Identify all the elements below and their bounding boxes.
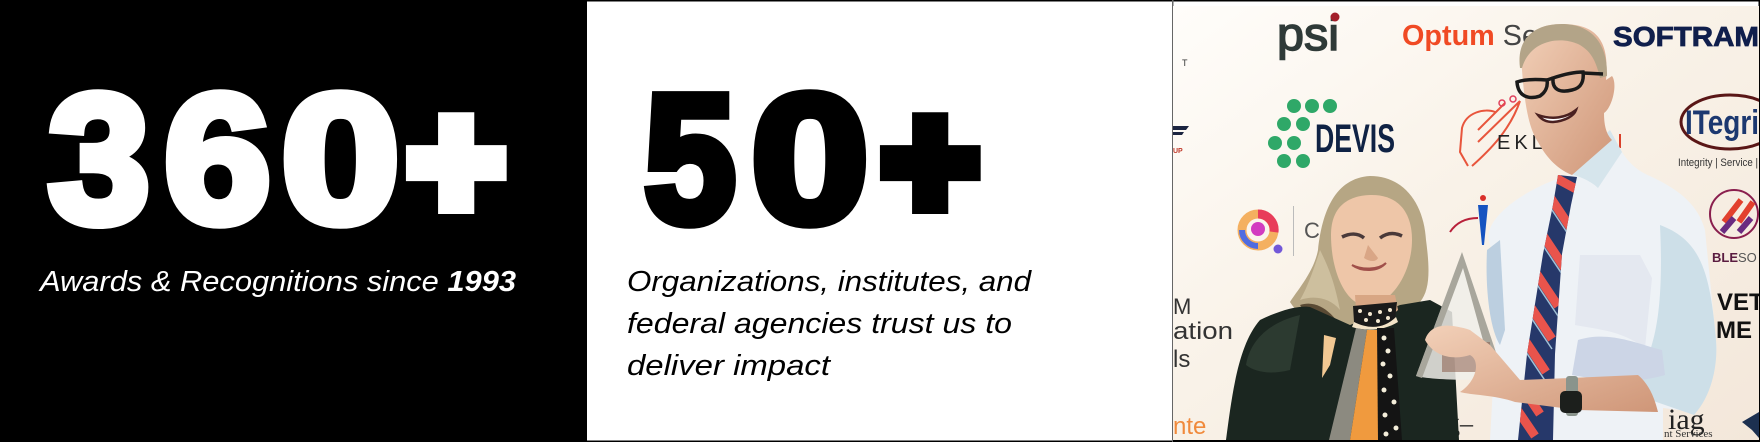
logo: text fragments: ls <box>1173 346 1190 373</box>
caption: organizations trust us <box>627 266 1032 382</box>
big number: 360+: 0 <box>281 56 400 261</box>
logo: partial left edge: UP <box>1173 148 1183 155</box>
logo: text fragments: ME <box>1716 317 1752 344</box>
person: woman <box>1226 176 1459 440</box>
watch <box>1560 376 1582 416</box>
big number: 360+: 3 <box>48 56 150 261</box>
big number: 50+: 5 <box>644 56 736 261</box>
logo: partial left edge <box>1173 58 1189 155</box>
logo: partial left edge: T <box>1182 58 1188 68</box>
logo: Bluesource ring <box>1710 190 1758 265</box>
logo: Bluesource ring: BLESO <box>1712 250 1757 265</box>
logo: psi: psi <box>1277 8 1339 60</box>
big number: 360+ <box>48 56 504 261</box>
logo: Q: C <box>1304 218 1320 243</box>
smile <box>1538 110 1576 122</box>
hair <box>1290 176 1428 333</box>
logo: text fragments: nt Services <box>1664 428 1713 440</box>
person: man <box>1487 24 1716 440</box>
logo: Optum: Optum Se <box>1402 20 1538 52</box>
glasses <box>1517 72 1603 97</box>
big number: 50+: 0 <box>751 56 869 261</box>
panel: awards stat <box>0 0 587 442</box>
big number: 50+: + <box>882 69 978 253</box>
head <box>1521 24 1614 175</box>
logo: text fragments: iag <box>1668 403 1705 436</box>
logo: Devis <box>1268 99 1395 168</box>
caption: organizations trust us: deliver impact <box>627 350 832 382</box>
big number: 50+ <box>644 56 978 261</box>
logo: text fragments: nte <box>1173 413 1206 440</box>
logo: Devis: DEVIS <box>1315 117 1395 161</box>
panel: award photo <box>1172 0 1760 442</box>
collar <box>1565 130 1622 188</box>
caption: organizations trust us: federal agencies trust us to <box>627 308 1012 340</box>
logo: text fragments: M <box>1173 294 1191 319</box>
logo: ITegrity <box>1678 95 1760 169</box>
caption: awards and recognitions: Awards & Recognitions since 1993 <box>38 266 516 298</box>
sponsor logos backdrop <box>1173 8 1760 440</box>
logo: blue figure <box>1450 195 1488 245</box>
logo: Eklipse <box>1460 96 1621 166</box>
logo: text fragments: ation <box>1173 318 1233 345</box>
logo: Softram: SOFTRAM <box>1613 21 1759 52</box>
shirt <box>1488 130 1716 440</box>
scarf and blouse <box>1353 302 1397 328</box>
logo: Eklipse: EKL <box>1497 132 1547 154</box>
logo: Q <box>1242 206 1320 256</box>
big number: 360+: + <box>408 69 504 253</box>
face and neck <box>1331 195 1412 306</box>
trophy <box>1416 252 1504 380</box>
logo: text fragments: g– <box>1447 409 1474 438</box>
logo: text fragments <box>1173 289 1760 440</box>
big number: 360+: 6 <box>164 56 271 261</box>
hand and forearm <box>1425 326 1658 416</box>
panel: organizations stat <box>587 0 1173 442</box>
jacket <box>1226 300 1459 440</box>
caption: organizations trust us: Organizations, institutes, and <box>627 266 1032 298</box>
tie <box>1518 175 1577 440</box>
